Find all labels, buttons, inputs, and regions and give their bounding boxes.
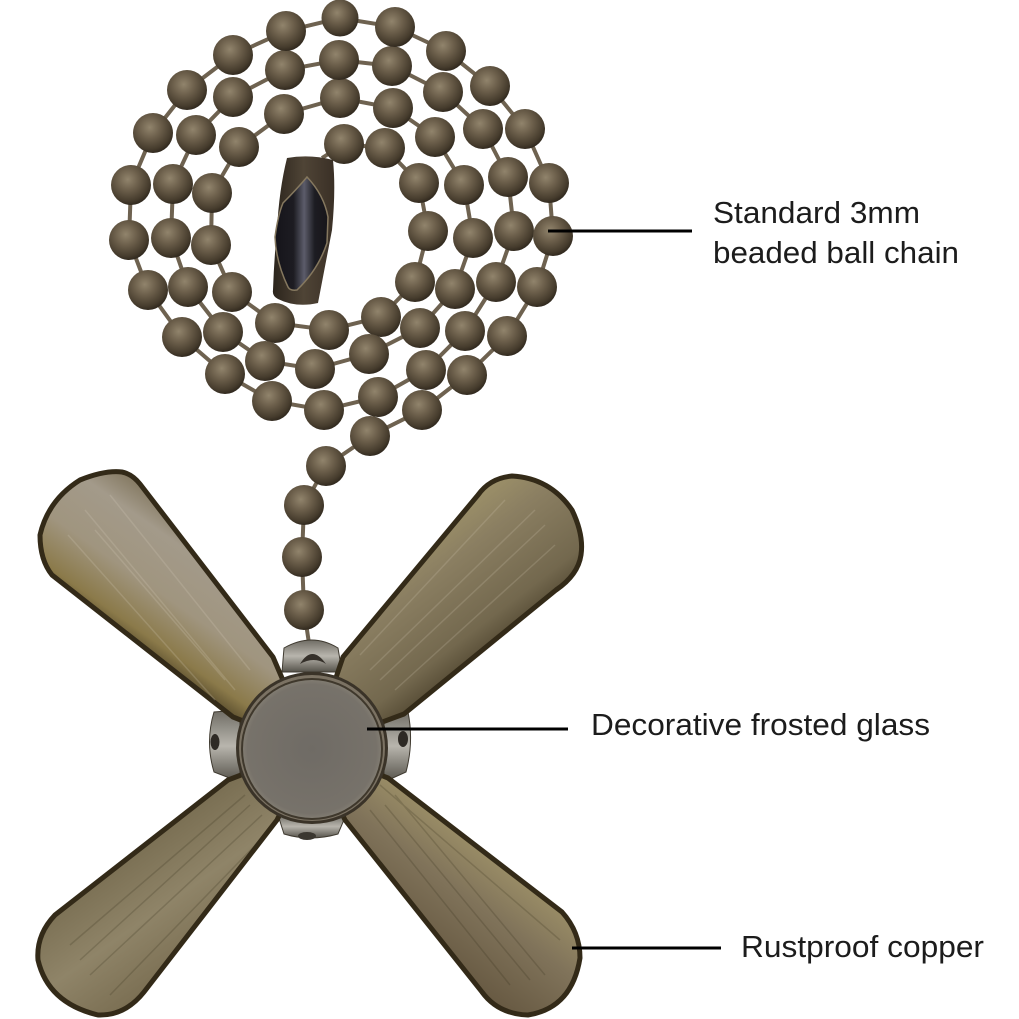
callout: ball chain — [548, 195, 959, 270]
frosted glass — [243, 680, 381, 818]
pull handle: four-blade cross — [38, 472, 582, 1015]
blade: top left — [40, 472, 312, 748]
beaded ball chain — [109, 0, 573, 650]
blade mounts around the hub — [210, 640, 411, 840]
blade: bottom left — [38, 748, 312, 1015]
callout: ball chain: Standard 3mm — [713, 195, 920, 230]
blade: bottom right — [312, 748, 580, 1015]
callout: frosted glass: Decorative frosted glass — [591, 707, 930, 742]
callout: rustproof copper: Rustproof copper — [741, 929, 984, 964]
blade: top right — [312, 476, 582, 748]
brushed metal streaks — [68, 495, 560, 995]
chain clasp connector — [273, 156, 334, 305]
hub ring — [236, 672, 388, 824]
callout: ball chain: beaded ball chain — [713, 235, 959, 270]
